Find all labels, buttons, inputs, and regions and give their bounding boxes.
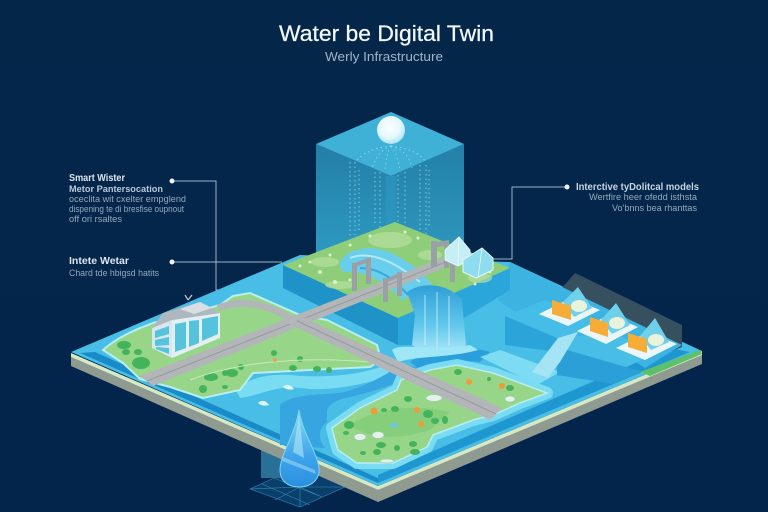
callout: intake water: Intete Wetar	[69, 255, 129, 267]
callout: smart water: Smart Wister	[69, 172, 125, 184]
shed 3	[616, 318, 677, 360]
callout: intake water	[69, 255, 159, 279]
base board	[71, 255, 702, 502]
callout: interactive models	[576, 181, 699, 214]
water droplet	[280, 410, 319, 487]
callout: smart water: oceclita wit cxelter empglend	[69, 194, 186, 205]
droplet base grid	[250, 440, 345, 507]
holographic cube	[316, 112, 464, 268]
bridge towers	[352, 240, 455, 302]
upper waterfall	[340, 248, 432, 300]
sphere	[377, 116, 405, 144]
title: Water be Digital Twin	[279, 21, 494, 46]
water channels	[237, 349, 560, 448]
callout: smart water	[69, 172, 186, 225]
raised terrain: reservoirs and model sheds	[498, 262, 702, 384]
main waterfall	[407, 285, 466, 352]
callout: smart water: Metor Pantersocation	[69, 184, 163, 195]
shed 2	[577, 303, 638, 344]
callout: interactive models: Wertfire heer ofedd isthsta	[589, 192, 698, 203]
callout: interactive models: Vo'bnns bea rhanttas	[612, 203, 697, 214]
callout: smart water: dispening te di bresfise oupnout	[69, 204, 184, 215]
glass houses	[445, 237, 493, 278]
icebergs	[258, 385, 294, 406]
office building	[152, 295, 220, 358]
roads	[140, 258, 502, 420]
island: left	[103, 293, 381, 398]
leader lines	[170, 178, 570, 290]
island: bottom	[332, 365, 547, 463]
raised green platform	[283, 222, 510, 362]
shed 1	[539, 287, 600, 326]
callout: smart water: off ori rsaltes	[69, 214, 122, 225]
callout: interactive models: Interctive tyDolitcal models	[576, 181, 699, 193]
subtitle: Werly Infrastructure	[325, 49, 443, 64]
callout: intake water: Chard tde hbigsd hatits	[69, 268, 159, 279]
